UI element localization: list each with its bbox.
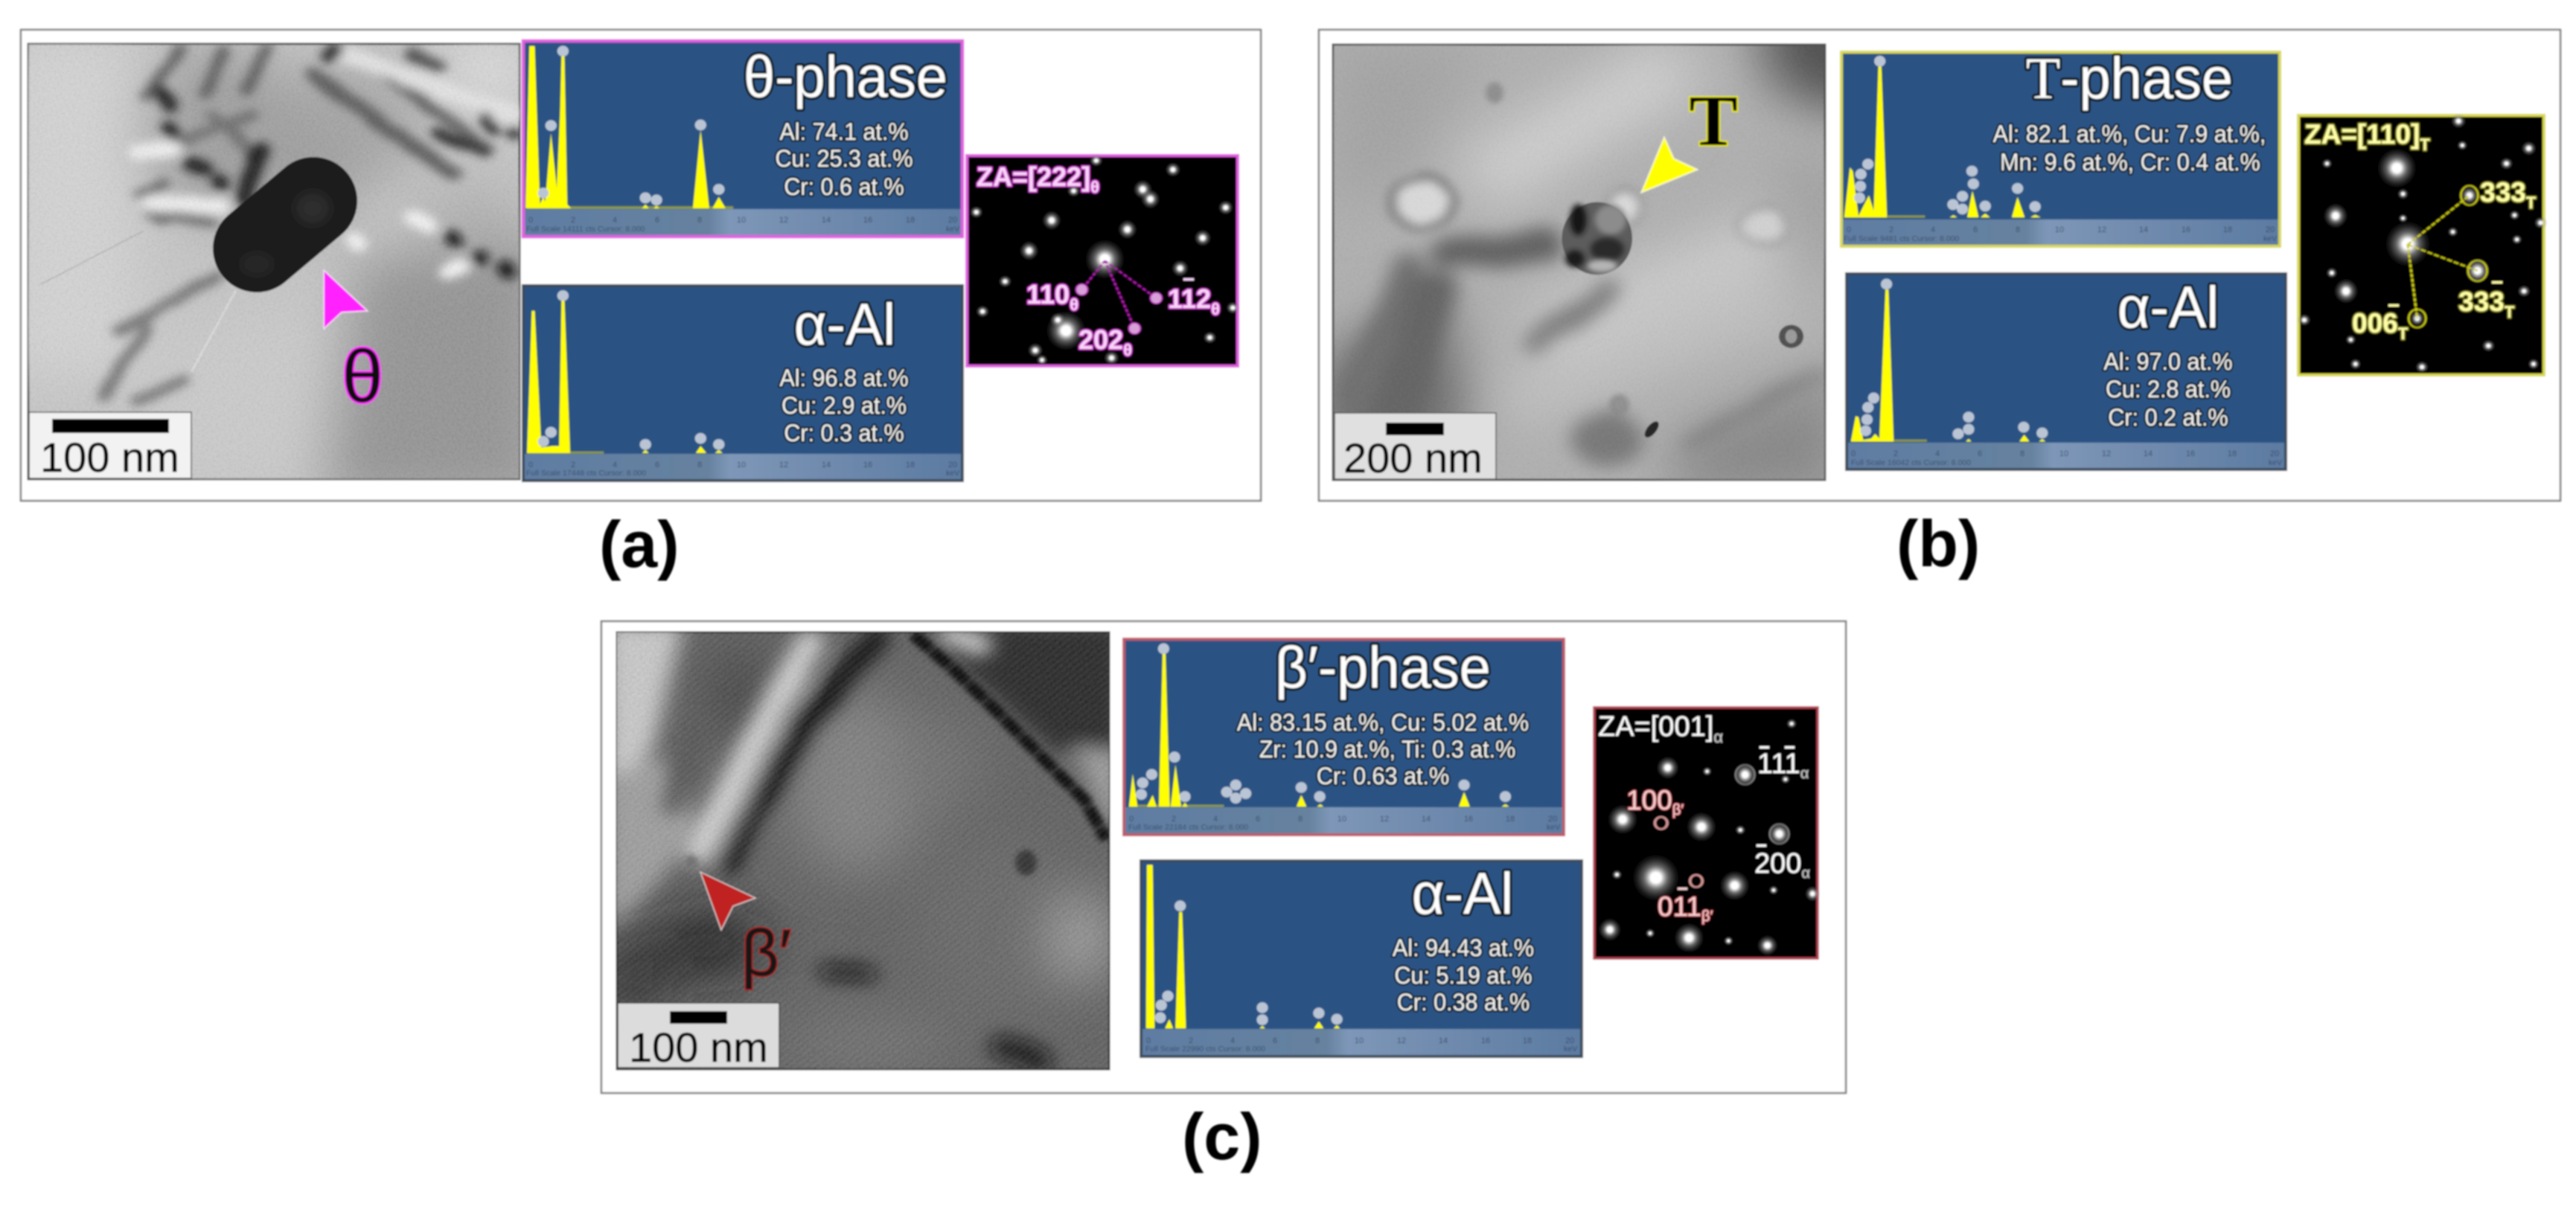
energy axis labels: 6 [1256, 815, 1260, 824]
energy axis labels: 12 [1380, 815, 1389, 824]
index labels: θ [1211, 300, 1220, 318]
energy axis labels: 20 [2266, 225, 2275, 234]
energy axis labels: 6 [655, 216, 659, 225]
axis footer: keV [1547, 823, 1560, 832]
scale bar: 100 nm [29, 412, 191, 481]
energy axis labels: 18 [2228, 449, 2237, 458]
index labels: 112 [1168, 283, 1211, 314]
arrowhead: magenta pointer [324, 270, 368, 329]
energy axis labels: 20 [948, 461, 957, 469]
title: α-Al [1412, 862, 1513, 926]
EDS spectrum: T-phase [1841, 46, 2280, 246]
energy axis labels: 10 [1337, 815, 1346, 824]
energy axis labels: 12 [779, 216, 788, 225]
scale bar: 200 nm [1335, 413, 1496, 481]
scale bar: 100 nm: 100 nm [40, 434, 179, 481]
energy axis labels: 14 [2144, 449, 2152, 458]
title: θ-phase [744, 45, 947, 109]
energy axis labels: 14 [2139, 225, 2148, 234]
composition: Zr: 10.9 at.%, Ti: 0.3 at.% [1259, 736, 1515, 763]
energy axis labels: 14 [1422, 815, 1431, 824]
energy axis labels: 4 [1213, 815, 1218, 824]
composition: Cr: 0.3 at.% [784, 420, 904, 446]
composition: Al: 94.43 at.% [1393, 935, 1534, 961]
energy axis labels: 2 [571, 461, 575, 469]
zone axis label: ZA=[222] [977, 161, 1090, 192]
zone axis label: ZA=[110] [2304, 119, 2420, 150]
axis footer: keV [1564, 1045, 1577, 1054]
EDS spectrum: alpha-Al matrix (a) [523, 286, 962, 481]
index labels: 111 [1757, 748, 1800, 780]
energy axis labels: 8 [697, 216, 702, 225]
energy axis labels: 8 [697, 461, 702, 469]
composition [2103, 348, 2233, 431]
spectrum peaks [1129, 644, 1511, 807]
energy axis labels: 10 [737, 461, 746, 469]
EDS spectrum: alpha-Al matrix (b) [1847, 274, 2286, 469]
energy axis labels: 8 [1315, 1036, 1320, 1045]
energy axis labels: 16 [863, 461, 872, 469]
composition [1993, 121, 2266, 176]
composition: Al: 74.1 at.% [779, 118, 909, 145]
energy axis labels: 6 [1973, 225, 1978, 234]
panel: (c) beta-prime phase [601, 621, 1846, 1093]
label: theta: θ [342, 335, 383, 418]
energy axis labels: 16 [1464, 815, 1473, 824]
composition: Cu: 2.8 at.% [2106, 376, 2231, 403]
composition: Mn: 9.6 at.%, Cr: 0.4 at.% [2000, 149, 2260, 176]
axis footer: Full Scale 16042 cts Cursor: 8.000 [1851, 458, 1971, 467]
energy axis labels: 2 [1189, 1036, 1193, 1045]
TEM micrograph: beta-prime precipitate [602, 623, 1122, 1083]
arrowhead: red pointer [700, 872, 755, 930]
panel label (b): (b) [1896, 507, 1980, 580]
TEM micrograph: T precipitate [1331, 42, 1827, 482]
diffraction pattern: ZA=[001] alpha [1594, 708, 1820, 958]
label: T: T [1689, 81, 1738, 161]
zone axis label: ZA=[001] [1598, 711, 1713, 743]
diffraction spots [1599, 719, 1820, 956]
composition: Cr: 0.2 at.% [2108, 404, 2228, 431]
energy axis labels: 6 [1273, 1036, 1277, 1045]
energy axis labels: 2 [571, 216, 575, 225]
energy axis labels: 2 [1889, 225, 1893, 234]
zone axis label: α [1713, 728, 1723, 746]
index labels: 200 [1754, 848, 1801, 879]
energy axis labels: 20 [2270, 449, 2279, 458]
index labels: β′ [1701, 908, 1713, 925]
spectrum peaks [1844, 56, 2041, 217]
panel: (b) T phase [1317, 0, 2560, 501]
EDS spectrum: beta-prime-phase [1124, 635, 1564, 835]
composition: Cr: 0.6 at.% [784, 173, 904, 200]
scale bar: 200 nm: 200 nm [1343, 435, 1483, 481]
energy axis labels: 2 [1172, 815, 1176, 824]
index labels: 100 [1626, 785, 1672, 815]
scale bar: 100 nm [618, 1003, 779, 1071]
energy axis labels: 12 [779, 461, 788, 469]
energy axis labels: 18 [906, 461, 915, 469]
index labels: α [1801, 865, 1810, 882]
energy axis labels: 16 [863, 216, 872, 225]
axis footer: Full Scale 14111 cts Cursor: 8.000 [526, 225, 645, 234]
composition: Cr: 0.63 at.% [1317, 763, 1449, 789]
index labels: 333 [2458, 286, 2505, 317]
energy axis labels: 2 [1893, 449, 1898, 458]
EDS spectrum: alpha-Al matrix (c) [1141, 861, 1582, 1057]
energy axis labels: 16 [2186, 449, 2195, 458]
small particle [1779, 325, 1803, 348]
energy axis labels: 4 [613, 461, 617, 469]
energy axis labels: 0 [528, 216, 533, 225]
grain boundary [913, 635, 1107, 839]
energy axis labels: 10 [2059, 449, 2068, 458]
energy axis labels: 6 [1978, 449, 1982, 458]
index labels: θ [1070, 295, 1078, 314]
composition: Cu: 25.3 at.% [775, 145, 913, 172]
index labels: 011 [1658, 891, 1701, 922]
index labels [2352, 177, 2537, 343]
energy axis labels: 14 [1439, 1036, 1448, 1045]
composition: Al: 97.0 at.% [2103, 348, 2233, 375]
energy axis labels: 0 [1847, 225, 1851, 234]
composition [779, 365, 909, 446]
index labels: T [2526, 193, 2537, 212]
index labels: θ [1123, 341, 1132, 359]
axis footer: keV [2263, 234, 2277, 243]
energy axis labels: 6 [655, 461, 659, 469]
zone axis label: T [2420, 135, 2430, 154]
diffraction pattern: ZA=[222] theta [967, 155, 1239, 366]
index labels: β′ [1672, 802, 1684, 818]
index labels: 110 [1026, 279, 1070, 310]
panel label (a): (a) [599, 507, 680, 581]
composition [1393, 935, 1534, 1016]
energy axis labels: 8 [2016, 225, 2020, 234]
energy axis labels: 16 [1481, 1036, 1490, 1045]
energy axis labels: 4 [613, 216, 617, 225]
energy axis labels: 16 [2182, 225, 2190, 234]
spectrum peaks [527, 290, 724, 454]
energy axis labels: 18 [1523, 1036, 1532, 1045]
title: T-phase [2026, 46, 2233, 111]
panel: (a) theta phase [0, 25, 1261, 504]
energy axis labels: 4 [1230, 1036, 1235, 1045]
particle: theta precipitate [240, 192, 330, 275]
composition [775, 118, 913, 200]
arrowhead: yellow pointer [1641, 137, 1698, 193]
title: α-Al [2118, 275, 2219, 340]
index labels: 202 [1078, 324, 1123, 355]
energy axis labels: 10 [1355, 1036, 1364, 1045]
particle: T precipitate [1562, 202, 1632, 275]
energy axis labels: 14 [822, 461, 831, 469]
composition [1237, 709, 1529, 789]
spectrum peaks [525, 46, 733, 209]
energy axis labels: 10 [737, 216, 746, 225]
energy axis labels: 20 [1548, 815, 1557, 824]
axis footer: Full Scale 22990 cts Cursor: 8.000 [1145, 1045, 1265, 1054]
energy axis labels: 20 [1565, 1036, 1574, 1045]
zone axis label: θ [1090, 178, 1099, 196]
index labels: 333 [2480, 177, 2526, 208]
energy axis labels: 0 [1851, 449, 1856, 458]
energy axis labels: 8 [1298, 815, 1303, 824]
axis footer: Full Scale 17448 cts Cursor: 8.000 [526, 469, 646, 478]
TEM micrograph: theta precipitate [26, 42, 522, 481]
index labels: T [2505, 303, 2515, 321]
energy axis labels: 12 [2102, 449, 2111, 458]
energy axis labels: 20 [948, 216, 957, 225]
index labels: T [2398, 324, 2409, 343]
spectrum peaks [1146, 865, 1342, 1028]
label: beta prime: β′ [741, 916, 791, 990]
diffraction pattern: ZA=[110] T [2298, 114, 2547, 375]
composition: Al: 82.1 at.%, Cu: 7.9 at.%, [1993, 121, 2266, 147]
energy axis labels: 12 [2097, 225, 2106, 234]
energy axis labels: 14 [822, 216, 831, 225]
diffraction spots [2298, 114, 2547, 373]
energy axis labels: 12 [1397, 1036, 1406, 1045]
axis footer: Full Scale 9481 cts Cursor: 8.000 [1844, 234, 1959, 243]
energy axis labels: 18 [2223, 225, 2232, 234]
index labels [1026, 278, 1220, 359]
composition: Cu: 2.9 at.% [782, 392, 907, 419]
axis footer: keV [2269, 458, 2282, 467]
energy axis labels: 4 [1931, 225, 1935, 234]
index labels: 006 [2352, 308, 2398, 339]
diffraction spots [970, 155, 1239, 365]
composition: Cu: 5.19 at.% [1394, 962, 1533, 989]
energy axis labels: 4 [1935, 449, 1940, 458]
title: α-Al [794, 292, 895, 357]
energy axis labels: 8 [2020, 449, 2024, 458]
energy axis labels: 18 [906, 216, 915, 225]
composition: Cr: 0.38 at.% [1397, 989, 1530, 1016]
axis footer: keV [946, 469, 959, 478]
spectrum peaks [1851, 279, 2048, 442]
energy axis labels: 10 [2055, 225, 2064, 234]
energy axis labels: 0 [1146, 1036, 1151, 1045]
index labels: α [1800, 766, 1809, 782]
energy axis labels: 0 [1129, 815, 1134, 824]
EDS spectrum: theta-phase [523, 41, 962, 237]
energy axis labels: 18 [1506, 815, 1515, 824]
axis footer: Full Scale 22184 cts Cursor: 8.000 [1128, 823, 1248, 832]
composition: Al: 83.15 at.%, Cu: 5.02 at.% [1237, 709, 1529, 736]
panel label (c): (c) [1182, 1100, 1262, 1173]
composition: Al: 96.8 at.% [779, 365, 909, 391]
index labels [1626, 746, 1810, 925]
title: β′-phase [1275, 635, 1491, 700]
energy axis labels: 0 [528, 461, 533, 469]
axis footer: keV [946, 225, 959, 234]
scale bar: 100 nm: 100 nm [629, 1024, 768, 1071]
